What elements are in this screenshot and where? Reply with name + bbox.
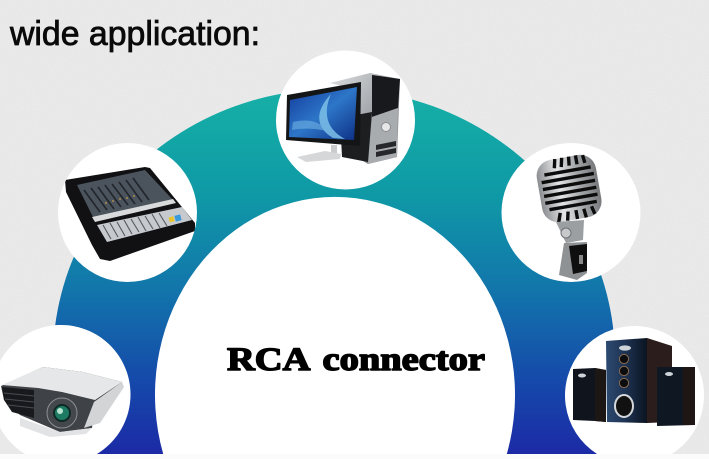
central white circle (155, 197, 515, 454)
icon: projector (0, 325, 131, 454)
icon: vintage microphone (502, 143, 640, 282)
icon: speaker system (565, 326, 704, 454)
gradient arc band (53, 89, 615, 454)
icon: desktop computer (276, 50, 415, 190)
centre label: RCA connector (227, 342, 485, 378)
title: wide application: (9, 15, 260, 53)
icon: audio mixer (58, 143, 197, 282)
